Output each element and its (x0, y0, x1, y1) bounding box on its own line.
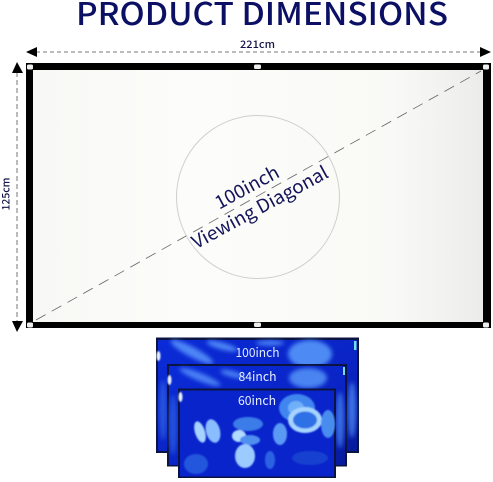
height dimension arrow (12, 62, 23, 332)
84 inch label: 84inch (238, 366, 276, 385)
size comparison: 100 inch screen (156, 336, 359, 453)
100 inch label: 100inch (236, 342, 280, 361)
circle around diagonal label (176, 116, 340, 278)
60 inch label: 60inch (238, 390, 276, 409)
jellyfish image (184, 394, 335, 474)
diagonal size label: 100inch (210, 159, 284, 215)
grommets (27, 64, 489, 328)
size comparison: 60 inch screen (178, 388, 336, 478)
projection screen (26, 63, 491, 328)
width label: 221cm (240, 37, 275, 52)
viewing diagonal label: Viewing Diagonal (187, 159, 333, 255)
viewing diagonal dashed line (36, 71, 481, 320)
width dimension arrow (26, 47, 491, 57)
size comparison: 84 inch screen (167, 364, 347, 466)
